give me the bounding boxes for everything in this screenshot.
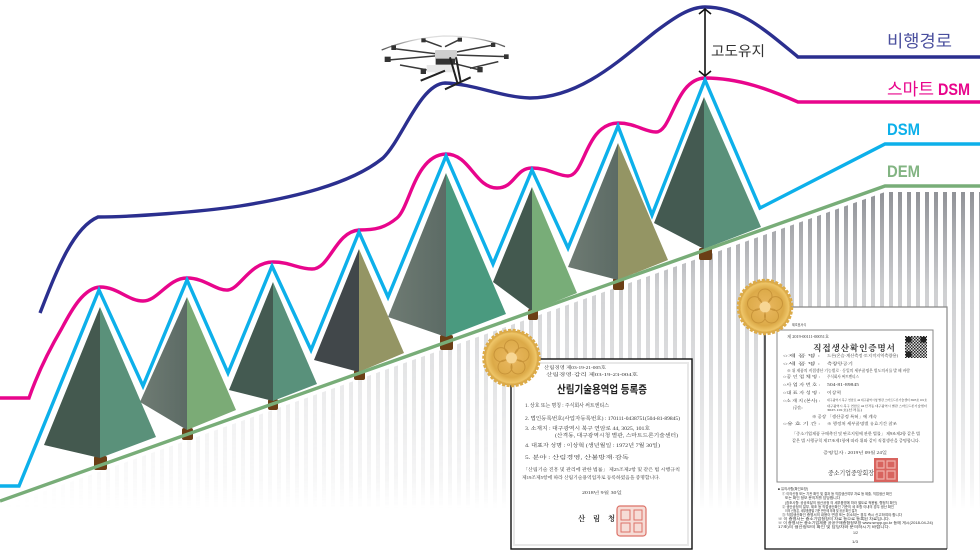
certificate body text xyxy=(783,352,927,456)
smart DSM line xyxy=(0,78,980,398)
legend: DEM: DEM xyxy=(887,162,920,181)
certificate footnotes: ① 이의신청 또는 기관 확인 및 결과 등 직접생산여부 자료 등 제출, 직접생산 확인 xyxy=(782,491,892,496)
certificate footnotes: 1/2 xyxy=(853,531,858,535)
certificate body text: 같은 법 시행규칙 제17조제1항에 따라 위와 같이 직접생산을 증명합니다. xyxy=(792,437,920,444)
certificate body text: 주식회사 써트엔티스 xyxy=(827,374,859,379)
certificate: direct production: 제 2019-00111-00051호 xyxy=(787,333,829,340)
certificate body text: ○제 품 명 : xyxy=(783,352,820,359)
certificate footnotes: ② 생산공정의 일부, 제조 등 직접생산확인 기준의 세 조항 이내의 경우 생산 확인 xyxy=(782,504,894,509)
certificate body text: ○유 효 기 간 : xyxy=(783,420,820,427)
certificate red seal xyxy=(874,458,898,482)
tree 3 xyxy=(229,282,317,410)
certificate red seal xyxy=(617,506,646,536)
certificate body text: 2. 법인등록번호(사업자등록번호) : 170111-0438751(504-81-89845) xyxy=(525,415,680,422)
tree 7 xyxy=(568,143,668,290)
tree 2 xyxy=(140,297,236,440)
certificate: direct production: 제조호서식 xyxy=(792,322,806,327)
certificate body text: (공장) : xyxy=(793,404,803,411)
certificate heading: 산림기술용역업 등록증 xyxy=(557,382,647,396)
certificate footnotes: 또는 확인 정보 문의처를 담당합니다 xyxy=(785,495,840,500)
certificate body text: 측량항공기 xyxy=(827,361,853,366)
certificate: direct production xyxy=(765,307,947,549)
certificate body text: 3. 소재지 : 대구광역시 북구 연암로 44, 3025, 101호 xyxy=(525,425,650,432)
certificate body text: 드론(온습·계산측정·토지적지역측량용) xyxy=(827,353,899,358)
flight path line xyxy=(40,7,980,313)
certificate body text: 2018년 9월 30일 xyxy=(582,489,622,496)
certificate body text: 504-81-89845 xyxy=(827,383,859,387)
DEM terrain line xyxy=(0,186,980,501)
certificate number lines xyxy=(544,364,639,378)
certificate number lines: 산림경영·감리 제03-19-23-004호 xyxy=(546,371,639,378)
certificate issuer: 중소기업중앙회장 xyxy=(828,468,875,477)
certificate footnotes xyxy=(778,486,933,544)
certificate body text: ※ 위 제품의 직접생산 기능별로 · 동일의 세부품명은 별도의서를 발 해 바람 xyxy=(787,368,910,373)
certificate body text: 대구광역시 북구 연암로 44 대구광역시청 별관 스마트드론기술센터 3025호 101호 xyxy=(827,397,927,402)
certificate: forestry registration xyxy=(511,359,692,549)
certificate body text: ○대 표 자 성 명 : xyxy=(783,389,820,396)
certificate body text: 대구광역시 북구 연암로 44 산격동 대구광역시 별관 스마트드론기술센터 xyxy=(827,403,927,408)
certificate issuer: 산 림 청 장 xyxy=(578,513,631,523)
certificate body text: ○소 재 지 (본사) : xyxy=(783,397,820,404)
certificate body text: 「산림기술 진흥 및 관리에 관한 법률」 제25조제2항 및 같은 법 시행규칙 xyxy=(523,466,680,473)
legend: flight path: 비행경로 xyxy=(887,32,952,51)
ground stripes below terrain xyxy=(160,192,980,488)
certificate footnotes: ※ 이 증명서는 중소기업청장의 자료 등으로 등록된 자료입니다. xyxy=(778,516,890,521)
tree 5 xyxy=(388,173,506,350)
certificate body text: 5. 분야 : 산림경영, 산불방재·감독 xyxy=(525,454,629,461)
certificate footnotes: (참조사항: 공공조달의 생산공정 의 세부품명에 따라 별도로 적용됨, 행정처 확인) xyxy=(785,500,897,505)
certificate body text: 증명일자 : 2019년 09월 24일 xyxy=(823,449,887,456)
QR code xyxy=(905,336,927,358)
icon: gold medallion 1 xyxy=(484,330,539,386)
certificate body text: 1. 상호 또는 명칭 : 주식회사 써트엔티스 xyxy=(525,402,609,409)
certificate body text: ※ 행정처 세부품명별 유효기간 참조 xyxy=(827,421,897,426)
certificate body text: 제19조제5항에 따라 산림기술용역업자로 등록하였음을 증명합니다. xyxy=(522,474,660,481)
certificate body text: 3025 101호(산격동) xyxy=(827,407,862,412)
certificate footnotes: ③ 직접생산확인 증명서의 내용이 변경 또는 취소되는 경우 즉시 신고하여야 합니다 xyxy=(782,512,902,517)
legend: smart DSM xyxy=(887,80,970,99)
legend: smart DSM: 스마트 xyxy=(887,80,934,99)
certificate number lines: 산림경영 제03-19-21-005호 xyxy=(544,364,607,371)
certificate body text: 「중소기업제품 구매촉진 및 판로지원에 관한 법률」 제9조제2항 같은 법 xyxy=(792,430,920,437)
forest of trees xyxy=(44,97,761,470)
certificate body text: ○공 인 업 체 명 : xyxy=(783,373,820,380)
altitude arrow xyxy=(699,9,711,76)
certificate footnotes: 17조)의 생산정보의 확인 및 담당자와 문의하시기 바랍니다. xyxy=(778,524,890,529)
certificate footnotes: ■ 유의사항(확인요망) xyxy=(778,486,808,491)
legend: smart DSM: DSM xyxy=(938,80,970,99)
tree 6 xyxy=(493,187,577,320)
certificate body text: ○세 품 명 : xyxy=(783,360,820,367)
certificate footnotes: 1/3 xyxy=(852,540,858,544)
certificate body text: ※ 공장 「생산공정 특허」에 계속 xyxy=(812,413,877,420)
tree 1 xyxy=(44,307,156,470)
certificate body text: 이상혁 xyxy=(827,390,841,395)
certificate body text xyxy=(522,402,680,496)
certificate heading: 직접생산확인증명서 xyxy=(813,342,895,353)
certificate footnotes: 이의 신청은, 세부품명별 기준 판단에 의해 및 공공 확인 절차 xyxy=(785,508,857,513)
legend: DSM: DSM xyxy=(887,120,920,139)
certificate body text: 4. 대표자 성명 : 이상혁 (생년월일 : 1972년 7월 30일) xyxy=(525,442,660,449)
certificate footnotes: ※ 이 증명서는 중소기업제품 공공구매종합정보망 www.smpp.go.kr 등에 게시(2018-04-24) xyxy=(778,520,933,525)
certificate body text: (산격동, 대구광역시청 별관, 스마트드론기술센터) xyxy=(555,432,678,439)
certificate body text: ○사 업 자 번 호 : xyxy=(783,381,820,388)
icon: drone xyxy=(382,36,509,89)
tree 4 xyxy=(314,249,404,380)
DSM line xyxy=(0,80,980,486)
tree 8 xyxy=(654,97,761,260)
icon: gold medallion 2 xyxy=(738,280,792,334)
altitude label: 고도유지 xyxy=(711,43,765,59)
